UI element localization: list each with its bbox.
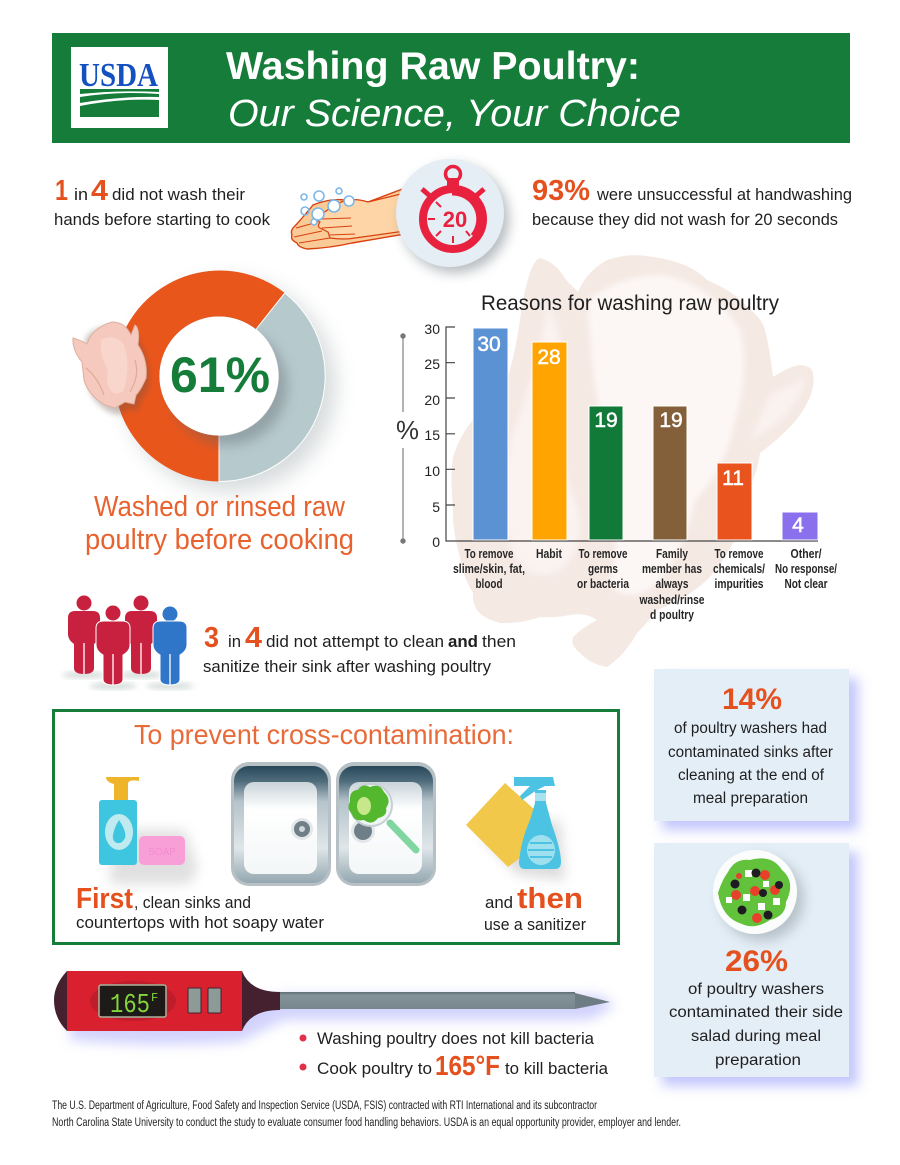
icon: sponge and spray bottle (466, 777, 565, 880)
bullet list: cooking poultry: to kill bacteria (505, 1060, 609, 1078)
y axis label: % (396, 415, 419, 445)
header banner (52, 33, 850, 143)
text: and then sanitize: then (517, 883, 583, 915)
bullet list: cooking poultry (300, 1030, 609, 1081)
bullet list: cooking poultry: 165°F (435, 1050, 500, 1081)
bar values: 4 (792, 514, 804, 537)
panel: 14% contaminated sinks: contaminated sinks after (668, 744, 833, 761)
stat: 93% unsuccessful at handwashing (532, 175, 852, 229)
category labels: impurities (714, 577, 764, 591)
chart title: Reasons for washing raw poultry (481, 292, 779, 315)
bullet list: cooking poultry: Cook poultry to (317, 1060, 432, 1078)
stat: 1 in 4 did not wash hands: 1 (55, 175, 68, 207)
icon: salad plate (713, 850, 804, 941)
bullet list: cooking poultry: Washing poultry does not kill bacteria (317, 1030, 595, 1048)
icon: washing hands with bubbles (291, 188, 405, 249)
category labels: slime/skin, fat, (453, 562, 525, 576)
stat: 3 in 4 did not clean and sanitize: and (448, 633, 478, 651)
icon: 20-second stopwatch: 20 (443, 207, 467, 232)
text: first clean: countertops with hot soapy water (76, 914, 325, 932)
bar values: 30 (477, 333, 501, 356)
category labels: Other/ (790, 547, 822, 561)
text: and then sanitize (484, 883, 586, 934)
panel: 26% contaminated side salad: preparation (715, 1052, 801, 1069)
stat: 93% unsuccessful at handwashing: 93% (532, 175, 590, 207)
panel: 26% contaminated side salad: contaminated their side (669, 1004, 843, 1021)
y axis ticks: 25 (424, 356, 440, 372)
bar chart: reasons for washing raw poultry (396, 292, 837, 622)
footer note: The U.S. Department of Agriculture, Food Safety and Inspection Service (USDA, FSIS) contracted with RTI International and its subcontractor (52, 1100, 597, 1112)
panel: 14% contaminated sinks: 14% (722, 683, 782, 716)
stat: 93% unsuccessful at handwashing: because they did not wash for 20 seconds (532, 211, 838, 229)
icon: double stainless sink (231, 762, 436, 886)
stat: 3 in 4 did not clean and sanitize: then (482, 633, 516, 651)
stat: 1 in 4 did not wash hands: 4 (91, 175, 108, 207)
bar values: 19 (594, 409, 618, 432)
category labels: To remove (578, 547, 628, 561)
y axis ticks: 15 (424, 427, 440, 443)
bar values: 28 (537, 346, 561, 369)
bar values: 11 (722, 467, 744, 490)
category labels: member has (642, 562, 702, 576)
text: first clean: , clean sinks and (134, 894, 251, 912)
text: and then sanitize: and (485, 894, 513, 912)
stat: 93% unsuccessful at handwashing: were unsuccessful at handwashing (596, 186, 852, 204)
stat: 3 in 4 did not clean and sanitize: did not attempt to clean (266, 633, 444, 651)
y axis ticks: 20 (424, 392, 440, 408)
category labels: chemicals/ (713, 562, 765, 576)
panel: 14% contaminated sinks: cleaning at the end of (678, 767, 825, 784)
stat: 3 in 4 did not clean and sanitize: 3 (204, 622, 219, 654)
y axis ticks: 5 (432, 499, 440, 515)
donut caption: Washed or rinsed raw (94, 491, 346, 523)
y axis ticks: 10 (424, 463, 440, 479)
panel: prevent cross-contamination (54, 710, 618, 944)
donut caption: poultry before cooking (85, 524, 354, 556)
donut chart: 61% washed or rinsed: 61% (170, 347, 270, 403)
category labels: Family (656, 547, 688, 561)
donut chart: 61% washed or rinsed (114, 271, 336, 492)
USDA logo: USDA (79, 57, 158, 94)
y axis label (396, 333, 419, 544)
donut caption (85, 491, 354, 556)
bar values (477, 333, 804, 537)
icon: meat thermometer: F (151, 991, 158, 1005)
panel: 26% contaminated side salad: of poultry washers (688, 981, 824, 998)
category labels: blood (476, 577, 502, 591)
category labels: Not clear (784, 577, 828, 591)
category labels: always (656, 577, 689, 591)
icon: raw chicken (73, 322, 150, 415)
category labels (453, 547, 837, 622)
category labels: washed/rinse (639, 593, 705, 607)
panel: 14% contaminated sinks (654, 669, 858, 830)
stat: 3 in 4 did not clean and sanitize (203, 622, 516, 676)
stat: 3 in 4 did not clean and sanitize: sanitize their sink after washing poultry (203, 658, 492, 676)
icon: colander with lettuce (348, 784, 416, 850)
panel: 26% contaminated side salad (654, 843, 858, 1086)
icon: group of people (62, 596, 194, 689)
panel: 14% contaminated sinks: meal preparation (693, 790, 808, 807)
stat: 1 in 4 did not wash hands: in (74, 186, 88, 204)
text: first clean: First (76, 883, 133, 915)
icon: 20-second stopwatch (396, 159, 509, 273)
icon: meat thermometer (54, 971, 615, 1045)
stat: 3 in 4 did not clean and sanitize: in (228, 633, 241, 651)
footer note: North Carolina State University to conduct the study to evaluate consumer food handling behaviors. USDA is an equal opportunity provider, employer and lender. (52, 1117, 681, 1129)
icon: meat thermometer: 165 (110, 991, 150, 1021)
category labels: To remove (714, 547, 764, 561)
bar values: 19 (659, 409, 683, 432)
y axis ticks: 0 (432, 534, 440, 550)
USDA logo (71, 47, 168, 128)
category labels: or bacteria (577, 577, 630, 591)
category labels: Habit (536, 547, 563, 561)
stat: 1 in 4 did not wash hands: did not wash their (112, 186, 246, 204)
panel: 14% contaminated sinks: of poultry washers had (674, 720, 827, 737)
icon: soap pump and bar (99, 777, 198, 884)
panel heading: To prevent cross-contamination: (134, 719, 514, 750)
stat: 1 in 4 did not wash hands (54, 175, 271, 229)
text: and then sanitize: use a sanitizer (484, 916, 586, 934)
background raw chicken watermark (452, 255, 814, 667)
title: Washing Raw Poultry: (226, 45, 640, 88)
footer note (52, 1100, 681, 1129)
category labels: germs (588, 562, 618, 576)
category labels: d poultry (650, 608, 694, 622)
category labels: To remove (464, 547, 514, 561)
panel: 26% contaminated side salad: salad during meal (691, 1028, 821, 1045)
title (226, 45, 681, 135)
y axis ticks (424, 321, 818, 550)
category labels: No response/ (775, 562, 837, 576)
title: Our Science, Your Choice (228, 93, 681, 135)
text: first clean (76, 883, 325, 932)
stat: 1 in 4 did not wash hands: hands before starting to cook (54, 211, 271, 229)
stat: 3 in 4 did not clean and sanitize: 4 (245, 622, 262, 654)
panel: 26% contaminated side salad: 26% (725, 945, 788, 978)
y axis ticks: 30 (424, 321, 440, 337)
icon: soap pump and bar: SOAP (148, 847, 176, 858)
bars (473, 328, 818, 540)
